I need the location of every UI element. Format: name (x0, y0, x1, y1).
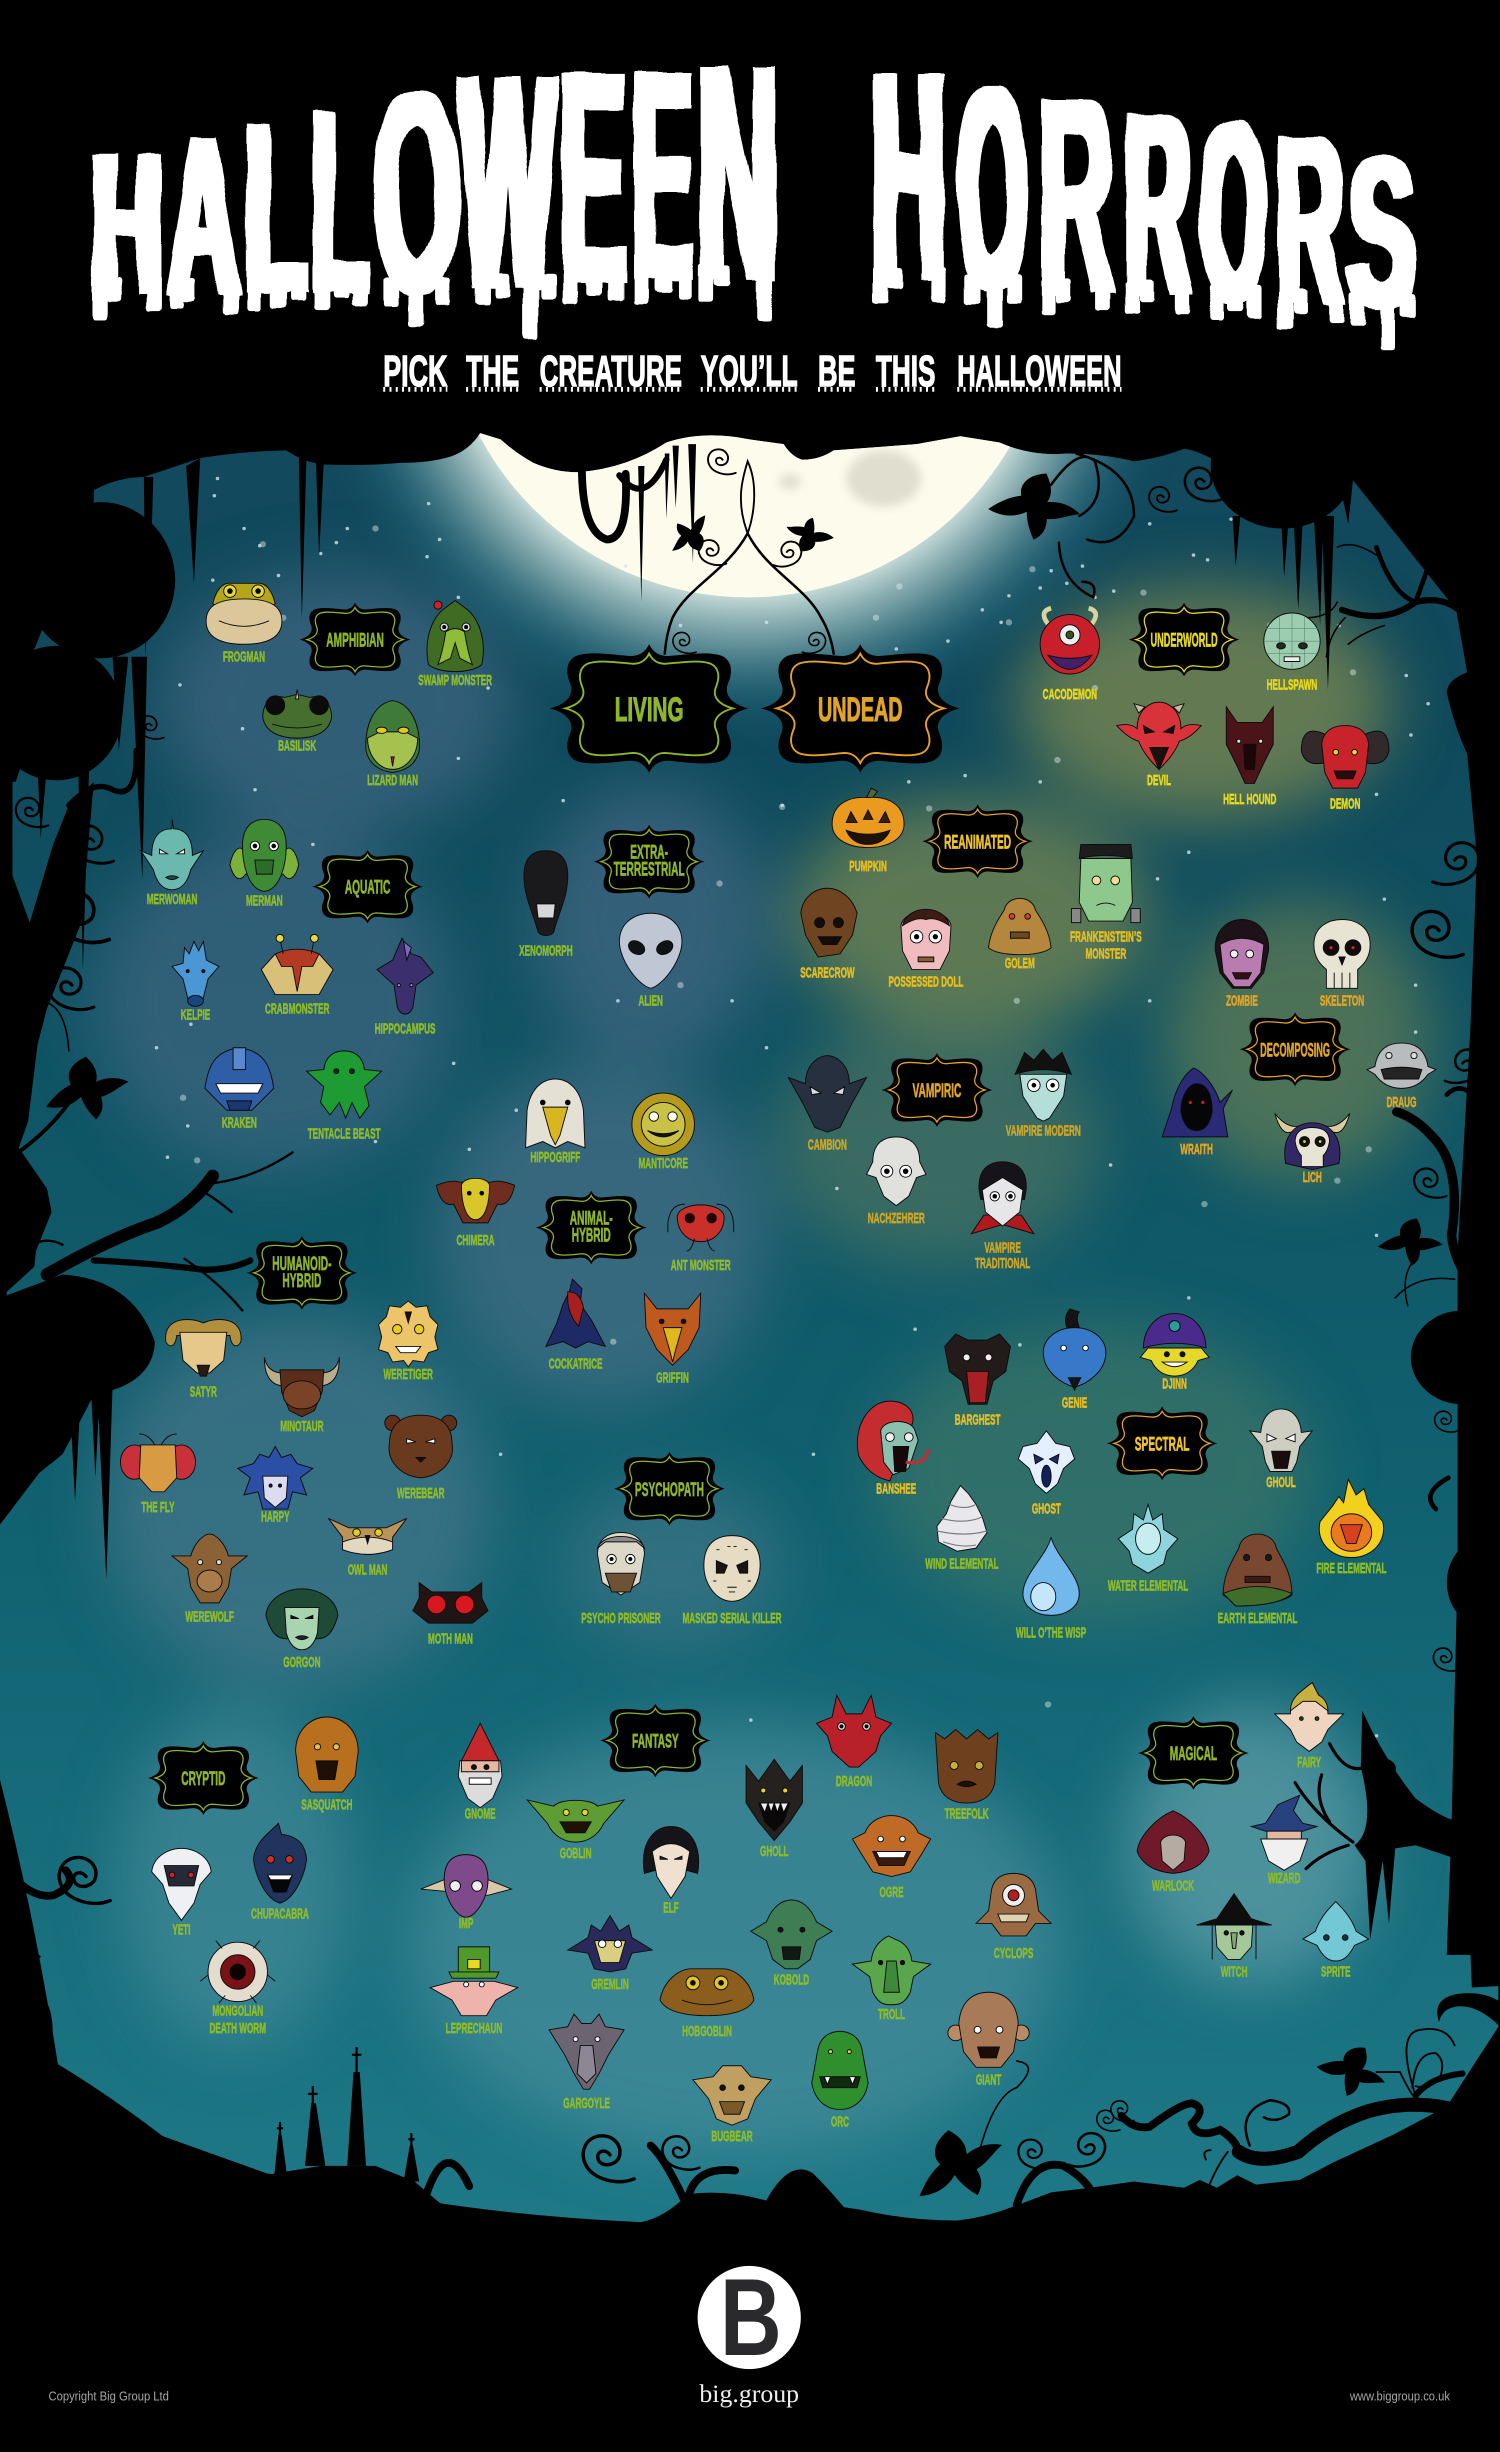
title: O (957, 29, 1028, 348)
creature: hellspawn (1264, 613, 1320, 693)
creature: the fly: THE FLY (141, 1499, 175, 1516)
creature: warlock (1137, 1811, 1209, 1894)
creature: werebear: WEREBEAR (397, 1484, 445, 1502)
creature: barghest: BARGHEST (955, 1411, 1001, 1428)
creature: chimera: CHIMERA (456, 1231, 495, 1248)
creature: fire elemental (1316, 1479, 1386, 1577)
creature: merwoman: MERWOMAN (147, 890, 197, 908)
plaque: undead: UNDEAD (818, 690, 903, 728)
creature: minotaur: MINOTAUR (280, 1417, 324, 1435)
subtitle: HALLOWEEN (957, 347, 1121, 396)
creature: giant: GIANT (976, 2071, 1002, 2088)
creature: the fly (120, 1434, 196, 1516)
plaque: magical: MAGICAL (1170, 1744, 1217, 1765)
creature: imp: IMP (459, 1915, 473, 1932)
title (91, 1, 1416, 355)
creature: gargoyle: GARGOYLE (563, 2094, 610, 2112)
creature: lizard man (366, 701, 419, 789)
creature: banshee (857, 1401, 928, 1497)
creature: devil: DEVIL (1147, 771, 1171, 789)
title: R (1039, 43, 1114, 350)
creature: wind elemental (925, 1486, 999, 1572)
title: L (244, 74, 307, 343)
creature: golem (989, 898, 1051, 972)
creature: fairy: FAIRY (1297, 1753, 1321, 1771)
creature: moth man (413, 1583, 488, 1647)
creature: chupacabra: CHUPACABRA (251, 1905, 309, 1922)
plaque: amphibian (300, 603, 410, 676)
moon glow (364, 433, 1142, 716)
creature: nachzehrer: NACHZEHRER (868, 1209, 925, 1227)
creature: will o'the wisp: WILL O’THE WISP (1016, 1624, 1086, 1641)
creature: hell hound: HELL HOUND (1223, 790, 1277, 807)
creature: leprechaun: LEPRECHAUN (446, 2019, 502, 2037)
creature: gremlin (568, 1916, 652, 1993)
title: O (374, 32, 460, 352)
creature: yeti: YETI (172, 1921, 191, 1938)
creature: frankenstein's monster: MONSTER (1085, 945, 1126, 962)
creature: minotaur (264, 1357, 339, 1435)
plaque: cryptid (148, 1741, 259, 1815)
creature: werewolf: WEREWOLF (185, 1608, 234, 1625)
title: A (167, 90, 239, 342)
vines: left curls (16, 716, 164, 1151)
plaque: cryptid: CRYPTID (181, 1769, 225, 1790)
plaque: undead (761, 644, 959, 773)
plaque: vampiric (882, 1053, 992, 1127)
creature: merman (230, 819, 299, 909)
creature: ant monster: ANT MONSTER (671, 1256, 731, 1274)
creature: crabmonster: CRABMONSTER (265, 1000, 330, 1017)
creature: griffin: GRIFFIN (656, 1369, 689, 1386)
creature: weretiger: WERETIGER (384, 1366, 433, 1383)
creature: xenomorph (519, 851, 573, 959)
creature: lizard man: LIZARD MAN (367, 771, 418, 789)
creature: wraith (1162, 1068, 1233, 1158)
title: O (1201, 71, 1267, 355)
creature: troll: TROLL (878, 2005, 905, 2023)
moon (479, 433, 1010, 598)
creature: tentacle beast: TENTACLE BEAST (308, 1125, 381, 1142)
creature: kraken (205, 1048, 274, 1131)
moon craters (779, 450, 921, 507)
creature: manticore: MANTICORE (638, 1155, 688, 1172)
creature: sprite (1303, 1902, 1369, 1980)
creature: zombie (1215, 920, 1269, 1009)
creature: giant (948, 1992, 1029, 2088)
title: N (698, 1, 779, 343)
creature: chimera (436, 1178, 515, 1248)
creature: cockatrice: COCKATRICE (549, 1355, 603, 1372)
creature: vampire traditional (971, 1162, 1034, 1272)
vines: bottom (425, 2029, 1462, 2210)
creature: weretiger (379, 1301, 438, 1383)
creature: draug: DRAUG (1387, 1094, 1416, 1111)
creature: yeti (152, 1848, 211, 1938)
title: E (560, 11, 626, 346)
creature: hellspawn: HELLSPAWN (1267, 676, 1317, 693)
creature: draug (1367, 1043, 1436, 1111)
creature: witch: WITCH (1221, 1963, 1247, 1980)
title: W (460, 13, 555, 354)
plaque: reanimated: REANIMATED (944, 832, 1011, 853)
creature: possessed doll (889, 909, 963, 990)
title: H (871, 10, 946, 341)
leaf and vines: top right (984, 453, 1222, 597)
creature: ogre (852, 1816, 931, 1901)
creature: skeleton (1314, 920, 1370, 1009)
title: R (1125, 60, 1190, 350)
church silhouette (266, 2047, 446, 2208)
creature: frankenstein's monster (1070, 844, 1142, 962)
creature: psycho prisoner: PSYCHO PRISONER (581, 1610, 661, 1627)
creature: scarecrow (800, 888, 857, 981)
creature: wizard: WIZARD (1268, 1869, 1301, 1887)
creature: wizard (1251, 1795, 1317, 1887)
leaf: left (46, 1057, 129, 1119)
creature: scarecrow: SCARECROW (800, 964, 855, 981)
creature: bugbear: BUGBEAR (711, 2127, 753, 2145)
silhouette: left blobs and drips (0, 438, 324, 1298)
creature: harpy: HARPY (261, 1508, 290, 1525)
creature: fairy (1275, 1683, 1344, 1771)
creature: banshee: BANSHEE (876, 1480, 916, 1497)
creature: barghest (945, 1334, 1010, 1428)
creature: imp (421, 1855, 511, 1932)
creature: treefolk: TREEFOLK (945, 1805, 989, 1822)
creature: zombie: ZOMBIE (1226, 992, 1258, 1009)
silhouette: right side trunk, vines and blobs (1376, 782, 1500, 2027)
creature: gholl (746, 1759, 802, 1860)
creature: nachzehrer (867, 1137, 926, 1227)
creature: demon (1301, 726, 1389, 812)
creature: vampire modern (1006, 1049, 1081, 1139)
creature: skeleton: SKELETON (1320, 992, 1364, 1009)
creature: hippocampus (375, 938, 435, 1037)
creature: mongolian death worm: MONGOLIAN (212, 2002, 263, 2019)
creature: masked serial killer: MASKED SERIAL KILLER (682, 1610, 782, 1627)
creature: mongolian death worm: DEATH WORM (209, 2019, 266, 2037)
creature: kobold (751, 1900, 832, 1988)
creature: sasquatch (296, 1717, 358, 1813)
creature: werebear (385, 1415, 457, 1502)
creature: basilisk: BASILISK (278, 737, 316, 754)
plaque: magical (1138, 1716, 1249, 1790)
creature: owl man (328, 1518, 407, 1578)
creature: golem: GOLEM (1005, 954, 1035, 972)
creature: griffin (644, 1293, 701, 1386)
soft cluster glows (94, 571, 1431, 2158)
plaque: reanimated (922, 804, 1033, 878)
silhouette: left lower curls (0, 1857, 110, 2049)
creature: hobgoblin: HOBGOBLIN (682, 2022, 732, 2040)
creature: vampire traditional: VAMPIRE (984, 1239, 1021, 1256)
creature: alien (619, 913, 682, 1009)
creature: cyclops: CYCLOPS (994, 1944, 1033, 1962)
plaque: fantasy: FANTASY (632, 1731, 679, 1753)
creature: cockatrice (546, 1279, 605, 1372)
creature: ghoul: GHOUL (1266, 1474, 1296, 1491)
creature: gholl: GHOLL (760, 1843, 789, 1860)
creature: gorgon: GORGON (283, 1653, 320, 1671)
creature: earth elemental: EARTH ELEMENTAL (1218, 1610, 1297, 1627)
creature: earth elemental (1218, 1534, 1297, 1627)
creature: merwoman (141, 819, 203, 908)
creature: alien: ALIEN (638, 992, 663, 1009)
creature: crabmonster (261, 934, 333, 1017)
creature: devil (1117, 702, 1201, 789)
plaque: spectral (1107, 1407, 1217, 1480)
creature: owl man: OWL MAN (348, 1561, 387, 1578)
plaque: fantasy (600, 1704, 711, 1777)
creature: treefolk (935, 1730, 998, 1822)
tree: bottom right (1295, 1711, 1462, 1939)
creature: frankenstein's monster: FRANKENSTEIN’S (1070, 928, 1142, 945)
creature: goblin (527, 1800, 624, 1861)
creature: werewolf (172, 1534, 247, 1625)
creature: lich: LICH (1303, 1169, 1322, 1186)
creature: manticore (632, 1093, 694, 1172)
plaque: extra-terrestrial (594, 825, 704, 898)
creature: sasquatch: SASQUATCH (301, 1796, 352, 1813)
creature: gremlin: GREMLIN (591, 1975, 629, 1993)
creature: orc: ORC (831, 2113, 849, 2130)
creature: demon: DEMON (1330, 795, 1360, 812)
creature: cambion (788, 1056, 867, 1153)
subtitle (383, 347, 1121, 396)
creature: fire elemental: FIRE ELEMENTAL (1316, 1560, 1386, 1577)
subtitle: BE (818, 347, 856, 396)
creature: basilisk (263, 690, 332, 754)
creature: dragon (816, 1695, 892, 1790)
plaque: vampiric: VAMPIRIC (912, 1081, 961, 1102)
creature: cambion: CAMBION (808, 1136, 847, 1153)
creature: satyr: SATYR (190, 1383, 217, 1400)
plaque: humanoid-hybrid (247, 1236, 357, 1310)
plaque: humanoid-hybrid: HYBRID (282, 1271, 321, 1292)
plaque: animal-hybrid: ANIMAL- (570, 1208, 613, 1229)
stars (156, 479, 1428, 1736)
creature: djinn (1140, 1314, 1209, 1392)
creature: warlock: WARLOCK (1152, 1877, 1194, 1894)
creature: ant monster (668, 1204, 734, 1274)
subtitle: THIS (876, 347, 935, 396)
creature: hippogriff (526, 1079, 585, 1166)
creature: harpy (238, 1446, 313, 1525)
silhouette: top right blob and tree (1211, 403, 1500, 782)
creature: frogman (206, 583, 282, 665)
plaque: psychopath (614, 1452, 725, 1526)
creature: pumpkin (832, 788, 904, 875)
creature: sprite: SPRITE (1321, 1963, 1351, 1980)
creature: hippogriff: HIPPOGRIFF (530, 1148, 580, 1166)
copyright: Copyright Big Group Ltd (48, 2389, 169, 2403)
creature: chupacabra (251, 1823, 309, 1922)
creature: moth man: MOTH MAN (428, 1630, 473, 1647)
creature: ghoul (1250, 1409, 1312, 1491)
tree branch: left (0, 1153, 292, 1579)
plaque: animal-hybrid: HYBRID (572, 1225, 611, 1247)
title: E (632, 9, 693, 342)
creature: possessed doll: POSSESSED DOLL (889, 973, 963, 990)
creature: pumpkin: PUMPKIN (849, 857, 887, 875)
creature: will o'the wisp (1016, 1537, 1086, 1641)
creature: gnome: GNOME (465, 1805, 496, 1822)
subtitle: CREATURE (540, 347, 682, 396)
moon vines and pendant tendrils (582, 444, 837, 654)
plaque: decomposing: DECOMPOSING (1260, 1040, 1330, 1061)
creature: leprechaun (430, 1947, 518, 2037)
creature: gargoyle (549, 2014, 624, 2112)
creature: psycho prisoner (581, 1532, 661, 1627)
plaque: underworld (1129, 603, 1239, 676)
plaque: decomposing (1240, 1012, 1350, 1086)
plaque: extra-terrestrial: TERRESTRIAL (614, 859, 685, 881)
creature: xenomorph: XENOMORPH (519, 942, 573, 959)
plaque: spectral: SPECTRAL (1135, 1434, 1190, 1455)
creature: satyr (166, 1319, 241, 1400)
creature: genie: GENIE (1062, 1394, 1087, 1411)
creature: frogman: FROGMAN (223, 648, 265, 665)
wordmark: big.group (699, 2379, 799, 2408)
website: www.biggroup.co.uk (1349, 2389, 1451, 2403)
creature: kobold: KOBOLD (774, 1971, 809, 1988)
creature: gorgon (266, 1589, 338, 1671)
creature: ogre: OGRE (880, 1883, 904, 1901)
creature: merman: MERMAN (246, 892, 283, 909)
creature: orc (812, 2031, 868, 2130)
creature: bugbear (693, 2066, 771, 2145)
plaque: living: LIVING (615, 691, 684, 729)
subtitle: PICK (383, 347, 448, 396)
plaque: aquatic (312, 850, 423, 924)
creature: mongolian death worm (200, 1941, 275, 2037)
creature: ghost: GHOST (1032, 1500, 1061, 1517)
logo: big group: B (720, 2256, 782, 2378)
creature: elf: ELF (663, 1899, 679, 1916)
subtitle: YOU’LL (701, 347, 798, 396)
creature: kelpie: KELPIE (181, 1006, 210, 1023)
creature: kraken: KRAKEN (222, 1114, 257, 1131)
creature: cacodemon: CACODEMON (1043, 685, 1097, 703)
plaque: underworld: UNDERWORLD (1150, 630, 1218, 652)
plaque: extra-terrestrial: EXTRA- (630, 842, 668, 864)
title: S (1348, 113, 1416, 353)
creature: gnome (458, 1723, 502, 1822)
creature: dragon: DRAGON (836, 1772, 872, 1790)
creature: hobgoblin (660, 1969, 754, 2040)
creature: goblin: GOBLIN (560, 1844, 591, 1861)
creature: wraith: WRAITH (1180, 1140, 1213, 1158)
title: L (311, 58, 368, 347)
plaque: aquatic: AQUATIC (345, 877, 390, 899)
creature: vampire traditional: TRADITIONAL (975, 1255, 1030, 1272)
plaque: living (550, 644, 748, 773)
plaque: animal-hybrid (536, 1191, 647, 1264)
creature: swamp monster (418, 600, 492, 689)
creature: water elemental (1108, 1504, 1188, 1594)
plaque: humanoid-hybrid: HUMANOID- (272, 1253, 331, 1275)
creature: water elemental: WATER ELEMENTAL (1108, 1577, 1188, 1594)
plaque: psychopath: PSYCHOPATH (635, 1479, 704, 1501)
night sky scene (0, 433, 1498, 2222)
creature: genie (1043, 1309, 1106, 1411)
creature: hell hound (1223, 707, 1277, 807)
logo: big group (698, 2256, 801, 2378)
creature: hippocampus: HIPPOCAMPUS (375, 1020, 435, 1037)
creature: lich (1275, 1113, 1350, 1186)
creature: cyclops (976, 1873, 1051, 1962)
subtitle: THE (466, 347, 519, 396)
title: R (1276, 89, 1344, 355)
creature: kelpie (172, 941, 219, 1023)
creature: swamp monster: SWAMP MONSTER (418, 671, 492, 689)
creature: cacodemon (1040, 608, 1100, 703)
creature: troll (852, 1936, 931, 2023)
creature: elf (643, 1826, 699, 1916)
title: H (91, 111, 163, 337)
creature: tentacle beast (307, 1051, 382, 1142)
creature: witch (1197, 1894, 1272, 1980)
creature: djinn: DJINN (1162, 1375, 1187, 1392)
creature: masked serial killer (682, 1536, 782, 1627)
title drips (100, 269, 1408, 346)
creature: ghost (1018, 1431, 1075, 1517)
creature: vampire modern: VAMPIRE MODERN (1006, 1122, 1081, 1139)
creature: wind elemental: WIND ELEMENTAL (925, 1555, 999, 1572)
plaque: amphibian: AMPHIBIAN (326, 630, 384, 652)
